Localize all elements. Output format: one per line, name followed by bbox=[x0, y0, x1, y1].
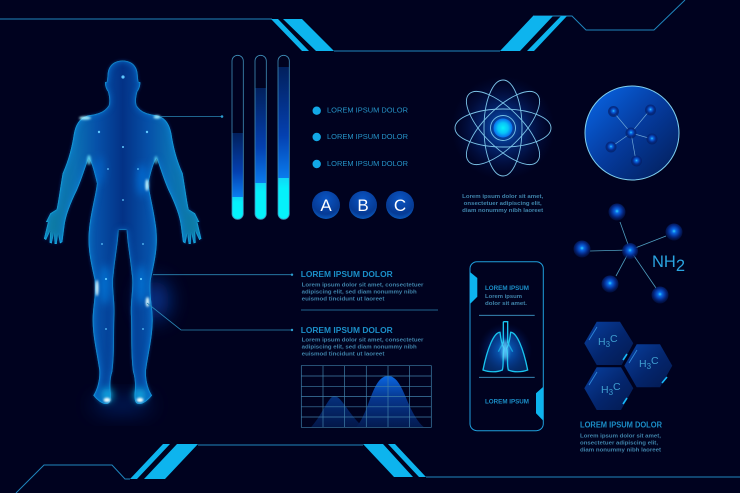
phone text top: Lorem ipsum bbox=[485, 294, 522, 300]
text block: first: euismod tincidunt ut laoreet bbox=[302, 296, 384, 302]
A B C buttons: B bbox=[357, 196, 369, 215]
text block: second: euismod tincidunt ut laoreet bbox=[302, 352, 384, 358]
phone panel bbox=[470, 262, 543, 431]
hexagon H3C molecules: C bbox=[613, 381, 621, 393]
inner light patches bbox=[96, 156, 147, 402]
text block: second: adipiscing elit, sed diam nonummy nibh bbox=[302, 344, 417, 350]
joint markers bbox=[98, 75, 148, 330]
legend list: LOREM IPSUM DOLOR bbox=[327, 132, 409, 141]
molecule sphere bbox=[585, 86, 679, 180]
top frame bbox=[0, 0, 685, 51]
lungs icon bbox=[478, 322, 532, 377]
leader lines bbox=[147, 115, 293, 331]
NH2 molecule bbox=[574, 204, 685, 304]
text block: second bbox=[301, 325, 424, 358]
phone tabs bbox=[470, 272, 543, 421]
text block: first: adipiscing elit, sed diam nonummy nibh bbox=[302, 290, 417, 296]
text block: bottom right bbox=[580, 420, 662, 454]
phone text top bbox=[485, 285, 529, 307]
legend list: LOREM IPSUM DOLOR bbox=[327, 106, 409, 114]
NH2 label: NH bbox=[652, 253, 676, 271]
text block: second: LOREM IPSUM DOLOR bbox=[301, 325, 393, 335]
atom icon bbox=[451, 76, 555, 180]
atom caption: Lorem ipsum dolor sit amet, bbox=[462, 194, 544, 200]
legend list bbox=[312, 106, 409, 168]
hexagon H3C molecules: H bbox=[598, 336, 606, 348]
atom caption bbox=[462, 194, 544, 214]
bar 1 bbox=[232, 55, 243, 219]
legend list: LOREM IPSUM DOLOR bbox=[327, 159, 409, 168]
hexagon H3C molecules bbox=[584, 322, 672, 410]
A B C buttons bbox=[312, 191, 414, 219]
text block: first: LOREM IPSUM DOLOR bbox=[301, 269, 393, 279]
text block: bottom right: LOREM IPSUM DOLOR bbox=[580, 420, 662, 430]
area chart bbox=[301, 366, 431, 427]
phone text bottom: LOREM IPSUM bbox=[485, 398, 529, 406]
A B C buttons: A bbox=[320, 196, 332, 215]
hexagon H3C molecules: 3 bbox=[606, 340, 611, 349]
hexagon H3C molecules: H bbox=[601, 384, 609, 396]
bottom frame bbox=[16, 444, 740, 493]
text block: first: Lorem ipsum dolor sit amet, consectetuer bbox=[302, 282, 424, 288]
atom caption: onsectetuer adipiscing elit, bbox=[464, 201, 542, 207]
text block: bottom right: onsectetuer adipiscing elit, bbox=[580, 441, 658, 447]
level bars bbox=[232, 55, 289, 219]
body silhouette bbox=[44, 61, 201, 404]
A B C buttons: C bbox=[394, 196, 406, 215]
hexagon H3C molecules: C bbox=[651, 355, 659, 367]
NH2 label: 2 bbox=[676, 257, 685, 275]
text block: first bbox=[301, 269, 424, 302]
atom caption: diam nonummy nibh laoreet bbox=[462, 208, 543, 214]
hexagon H3C molecules: C bbox=[610, 333, 618, 345]
bar 2 bbox=[255, 55, 266, 219]
hexagon H3C molecules: 3 bbox=[609, 388, 614, 397]
bar 3 bbox=[278, 55, 289, 219]
divider bbox=[301, 309, 438, 311]
text block: bottom right: Lorem ipsum dolor sit amet, bbox=[580, 434, 661, 440]
human body figure bbox=[44, 61, 201, 412]
glow around the knee and feet bbox=[141, 280, 169, 320]
hexagon H3C molecules: 3 bbox=[647, 362, 652, 371]
phone text top: dolor sit amet. bbox=[485, 301, 527, 307]
text block: second: Lorem ipsum dolor sit amet, consectetuer bbox=[302, 338, 424, 344]
phone text top: LOREM IPSUM bbox=[485, 285, 529, 292]
bright hot spots bbox=[79, 115, 160, 402]
text block: bottom right: diam nonummy nibh laoreet bbox=[580, 448, 661, 454]
hexagon H3C molecules: H bbox=[639, 358, 647, 370]
